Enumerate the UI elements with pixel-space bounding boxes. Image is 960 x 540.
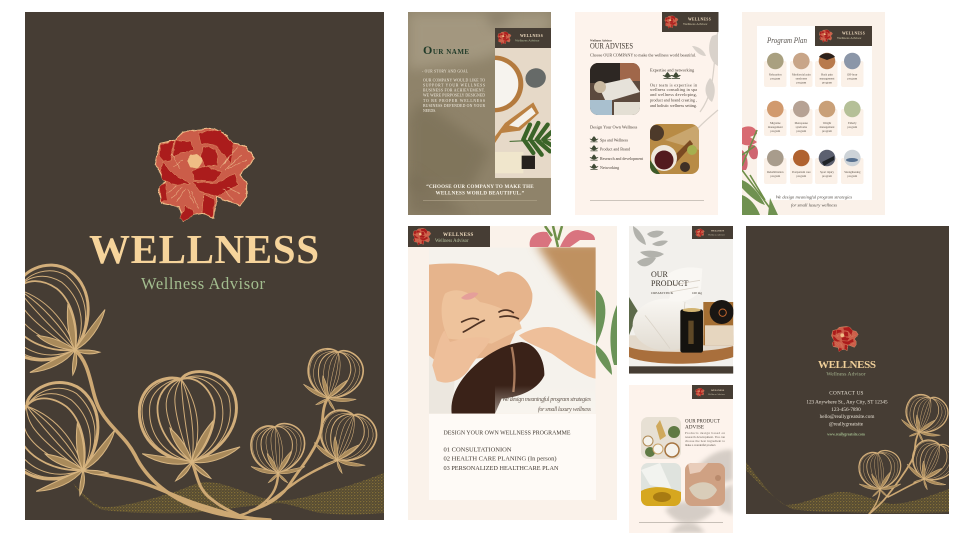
- text: expertise: and holistic wellness setting.: [650, 103, 697, 108]
- text: expertise: [650, 68, 697, 108]
- illustration: cotton branches: [25, 264, 378, 520]
- back cover title: WELLNESS: [818, 359, 876, 371]
- white card: [757, 26, 872, 200]
- gold dust wave: [746, 462, 949, 513]
- program grid: program: [770, 76, 781, 80]
- heading: our advises: OUR ADVISES: [590, 42, 633, 50]
- program grid: Postpartum care: [792, 170, 811, 174]
- page header: [815, 26, 872, 46]
- contact details: 123-456-7890: [831, 407, 861, 413]
- page header: WELLNESS: [711, 230, 725, 232]
- list icons: [590, 136, 598, 170]
- program grid: Back pain: [821, 72, 833, 76]
- photo: office desk: [590, 63, 640, 115]
- text: design your own list: Networking: [600, 165, 619, 170]
- program grid: program: [822, 80, 833, 84]
- text: our story: - OUR STORY AND GOAL: [422, 70, 468, 74]
- program grid: Sport injury: [820, 170, 834, 174]
- text: expertise: product and brand creating ,: [650, 98, 697, 104]
- product label: 100 mg: [692, 291, 702, 295]
- page header: WELLNESS: [688, 18, 711, 22]
- page header: Wellness Advisor: [708, 393, 725, 396]
- program grid: program: [822, 174, 833, 178]
- text: expertise: wellness consulting in spa: [650, 87, 697, 92]
- quote: WELLNESS WORLD BEAUTIFUL.”: [436, 192, 525, 196]
- page header: Wellness Advisor: [708, 234, 725, 236]
- quote: “CHOOSE OUR COMPANY TO MAKE THE: [426, 184, 534, 190]
- programme text: 03 PERSONALIZED HEALTHCARE PLAN: [444, 465, 559, 472]
- page header: Wellness Advisor: [683, 22, 708, 26]
- program grid: program: [847, 174, 858, 178]
- text: expertise: Our team is expertise in: [650, 82, 697, 88]
- page header: WELLNESS: [842, 32, 865, 36]
- text: product advise body: research development. You can: [685, 435, 726, 439]
- photo: spices: [648, 124, 699, 174]
- text: company body: NEEDS.: [423, 109, 436, 113]
- product photo: [629, 280, 734, 374]
- program grid: Strengthening: [844, 170, 861, 174]
- floral decoration: [530, 226, 617, 375]
- page header: WELLNESS: [711, 389, 725, 392]
- heading: our product: PRODUCT: [651, 279, 688, 288]
- panel: product advise page: [629, 385, 733, 533]
- photo: golden oil: [641, 463, 681, 506]
- photo: skincare flatlay: [641, 417, 681, 459]
- icon: peony flower: [155, 128, 254, 222]
- page header: [662, 12, 718, 32]
- text: company body: SUPPORT YOUR WELLNESS: [423, 84, 485, 88]
- program grid: program: [796, 80, 807, 84]
- leaf shadow: [665, 450, 733, 533]
- heading: our product advise: ADVISE: [685, 424, 704, 430]
- programme text: 01 CONSULTATIONION: [444, 446, 512, 454]
- contact details: hello@reallygreatsite.com: [820, 414, 874, 420]
- panel: cover page: [0, 12, 384, 520]
- contact details: [806, 390, 888, 428]
- program grid: program: [796, 174, 807, 178]
- page header: Wellness Advisor: [435, 239, 469, 244]
- page header: [692, 226, 733, 239]
- page header: Wellness Advisor: [837, 36, 862, 40]
- programme text: DESIGN YOUR OWN WELLNESS PROGRAMME: [444, 430, 571, 436]
- text: design your own list: Design Your Own Wellness: [590, 124, 638, 130]
- program grid: syndrome: [796, 76, 808, 80]
- program grid: program: [770, 129, 781, 133]
- contact details: @reallygreatsite: [829, 422, 864, 428]
- text: expertise: Expertise and networking: [650, 68, 695, 72]
- panel: back cover: [746, 226, 960, 515]
- heading: our name: OUR NAME: [423, 43, 470, 57]
- text: product advise body: make a wonderful product.: [685, 443, 716, 447]
- heading: our product: OUR: [651, 270, 669, 279]
- text: product advise body: [685, 431, 726, 447]
- text: company body: BUSINESS DEFENDED ON YOUR: [423, 104, 485, 108]
- heading: program plan: Program Plan: [766, 35, 807, 45]
- quote: [426, 184, 534, 196]
- script tagline: We design meaningful program strategies: [776, 194, 852, 200]
- program grid: Myofascial pain: [792, 72, 811, 76]
- text: design your own list: Spa and Wellness: [600, 138, 628, 142]
- script tagline: [776, 194, 852, 208]
- icon: lotus pair: [662, 72, 681, 79]
- program grid: Weight: [823, 121, 831, 125]
- product label: CREAM STICK: [651, 291, 674, 295]
- page header: [408, 226, 490, 247]
- program grid: program: [847, 76, 858, 80]
- script tagline on photo: for small luxury wellness: [538, 406, 592, 413]
- icon: peony flower: [831, 326, 858, 352]
- program grid: management: [820, 125, 835, 129]
- program grid: Off-hour: [847, 72, 857, 76]
- cover subtitle: Wellness Advisor: [141, 274, 266, 293]
- photo: salt bowl and palm: [495, 48, 551, 178]
- page header: [692, 385, 733, 399]
- program grid: syndrome: [796, 125, 808, 129]
- program grid: program: [847, 125, 858, 129]
- panel: our name page: [408, 12, 552, 215]
- program grid: management: [768, 125, 783, 129]
- text: company body: OUR COMPANY WOULD LIKE TO: [423, 78, 485, 82]
- text: company body: WE WERE PURPOSELY DESIGNED: [423, 94, 485, 98]
- illustration: cotton branches: [858, 394, 949, 514]
- text: expertise: and wellness developing,: [650, 92, 697, 98]
- text: company body: BUSINESS FOR ACHIEVEMENT.: [423, 88, 485, 92]
- program grid: [764, 53, 864, 184]
- website: www.reallygreatsite.com: [827, 432, 865, 436]
- program grid: Elderly: [848, 121, 857, 125]
- script tagline: for small luxury wellness: [791, 202, 837, 208]
- heading: our advises: Wellness Advisor: [590, 38, 613, 42]
- program grid: program: [770, 174, 781, 178]
- text: design your own list: Research and development: [600, 156, 644, 161]
- contact details: 123 Anywhere St., Any City, ST 12345: [806, 400, 888, 406]
- program grid: Relaxation: [769, 72, 782, 76]
- text: product advise body: Products design based on: [685, 431, 726, 435]
- programme text: [444, 430, 571, 472]
- text: design your own list: [590, 124, 644, 170]
- programme text: 02 HEALTH CARE PLANING (In person): [444, 456, 556, 462]
- olive leaf decoration: [633, 226, 668, 266]
- card: [429, 414, 596, 500]
- text: design your own list: Product and Brand: [600, 146, 630, 152]
- program grid: Menopause: [795, 121, 809, 125]
- cover title: WELLNESS: [89, 226, 319, 272]
- script tagline on photo: [502, 396, 592, 413]
- heading: our product: [651, 270, 688, 288]
- text: company body: [423, 78, 485, 113]
- page header: WELLNESS: [443, 233, 474, 238]
- program grid: Rehabilitation: [767, 170, 784, 174]
- program grid: management: [820, 76, 835, 80]
- program grid: Migraine: [770, 121, 781, 125]
- product label: [651, 291, 702, 295]
- panel: our product page: [629, 226, 734, 374]
- page header: WELLNESS: [520, 34, 543, 38]
- heading: our product advise: OUR PRODUCT: [685, 418, 721, 424]
- heading: our advises: [590, 38, 696, 58]
- page header: [495, 28, 552, 48]
- panel: program plan page: [742, 12, 885, 215]
- photo: facial massage: [429, 242, 605, 414]
- page header: Wellness Advisor: [515, 38, 540, 42]
- floral corner: [742, 126, 778, 215]
- text: company body: TO BE PROPER WELLNESS: [423, 99, 485, 103]
- panel: massage page: [408, 226, 617, 520]
- script tagline on photo: We design meaningful program strategies: [502, 396, 592, 403]
- heading: our product advise: [685, 418, 721, 430]
- contact details: CONTACT US: [829, 390, 864, 396]
- program grid: program: [822, 129, 833, 133]
- heading: our advises: Choose OUR COMPANY to make the wellness world beautiful.: [590, 52, 696, 58]
- panel: our advises page: [575, 12, 718, 215]
- program grid: program: [796, 129, 807, 133]
- text: product advise body: choose the best ingredient to: [685, 439, 726, 443]
- back cover subtitle: Wellness Advisor: [826, 372, 866, 378]
- gold dust wave: [73, 473, 384, 514]
- photo: clay texture: [685, 463, 725, 506]
